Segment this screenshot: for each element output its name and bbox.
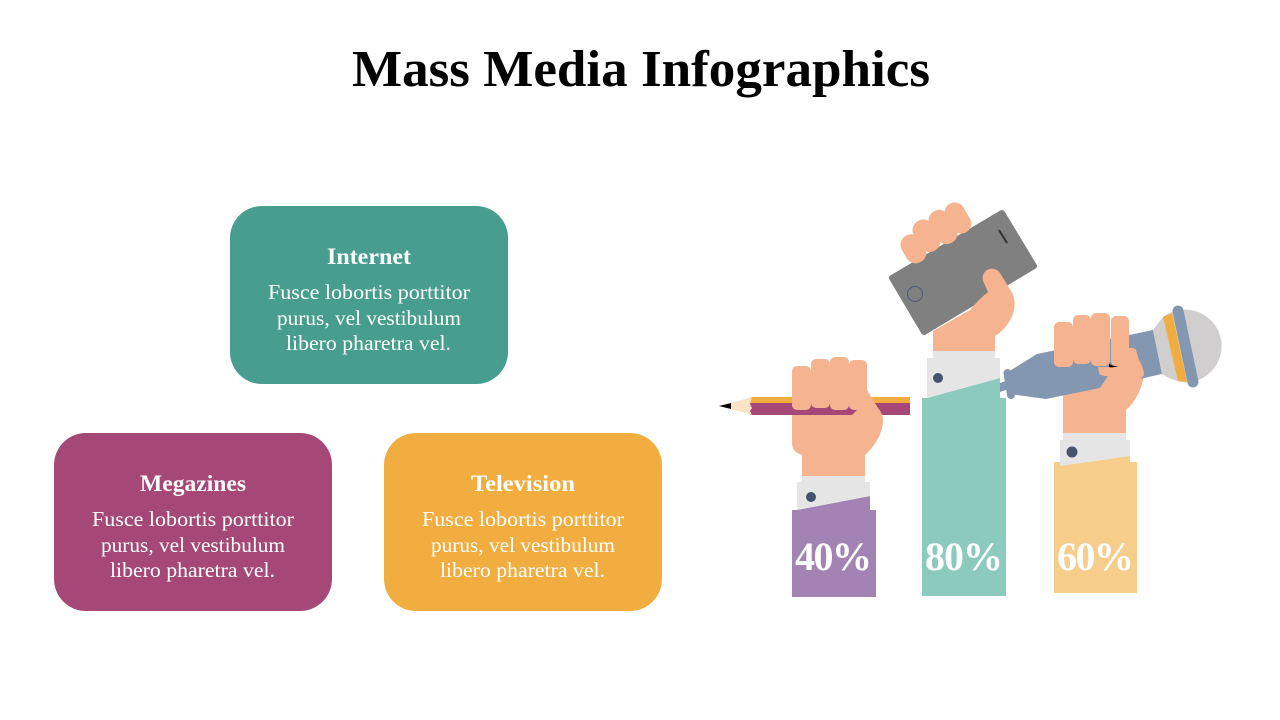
icon: hand gripping microphone xyxy=(1054,313,1144,395)
text: Television description: purus, vel vestibulum xyxy=(431,533,615,557)
shirt cuff xyxy=(1060,433,1130,466)
illustration: hand with phone, 80% xyxy=(892,199,1034,596)
panel: Megazines xyxy=(54,433,332,611)
shirt cuff xyxy=(797,476,870,510)
bar: 40% sleeve xyxy=(792,510,876,597)
icon: hand gripping phone xyxy=(897,199,1015,352)
text: Megazines description: Fusce lobortis porttitor xyxy=(92,507,294,531)
title: Mass Media Infographics xyxy=(352,41,930,98)
icon: microphone xyxy=(1000,310,1222,399)
text: Television description: Fusce lobortis porttitor xyxy=(422,507,624,531)
palm behind microphone xyxy=(1063,375,1144,434)
illustration: hand with microphone, 60% xyxy=(1000,310,1222,593)
text: Megazines description: libero pharetra vel. xyxy=(110,558,275,582)
shirt cuff xyxy=(927,351,1000,398)
bar: 80% sleeve xyxy=(922,398,1006,596)
heading: Television: Television xyxy=(471,471,575,496)
text: Television description xyxy=(422,507,624,582)
label: 80%: 80% xyxy=(925,534,1003,579)
panel: Television xyxy=(384,433,662,611)
text: Television description: libero pharetra vel. xyxy=(440,558,605,582)
text: Internet description: Fusce lobortis porttitor xyxy=(268,280,470,304)
text: Megazines description xyxy=(92,507,294,582)
text: Internet description: purus, vel vestibulum xyxy=(277,306,461,330)
text: Internet description: libero pharetra vel. xyxy=(286,331,451,355)
panel: Internet xyxy=(230,206,508,384)
icon: hand gripping pencil xyxy=(792,357,883,477)
bar: 60% sleeve xyxy=(1054,462,1137,593)
label: 60%: 60% xyxy=(1057,534,1134,579)
heading: Internet: Internet xyxy=(327,244,411,269)
text: Megazines description: purus, vel vestibulum xyxy=(101,533,285,557)
icon: pencil xyxy=(719,397,910,415)
icon: phone xyxy=(892,213,1034,332)
illustration: hand with pencil, 40% xyxy=(719,357,910,597)
label: 40%: 40% xyxy=(795,534,872,579)
text: Internet description xyxy=(268,280,470,355)
heading: Megazines: Megazines xyxy=(140,471,246,496)
